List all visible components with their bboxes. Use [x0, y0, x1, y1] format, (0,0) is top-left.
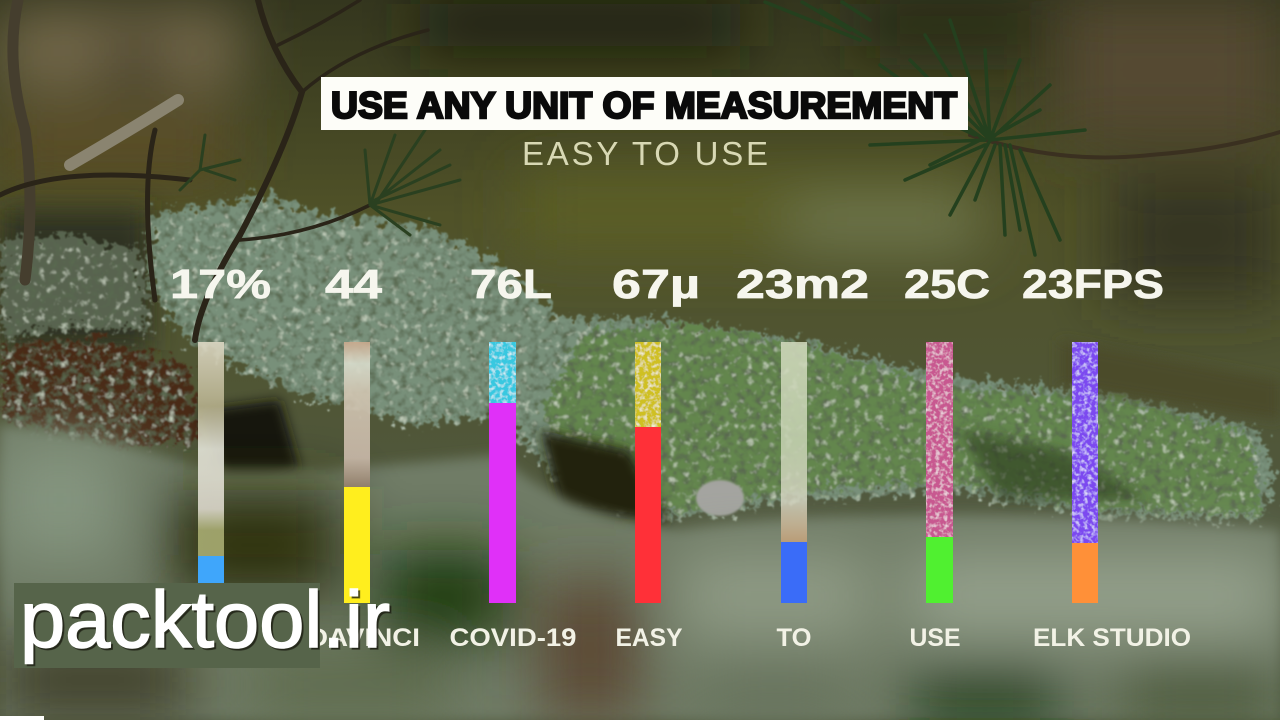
bar: 25C green	[926, 342, 953, 603]
watermark overlay panel	[14, 583, 320, 668]
category labels: DAVINCI	[308, 624, 420, 652]
subtitle: EASY TO USE	[522, 135, 768, 172]
bar: 23FPS orange	[1072, 342, 1098, 603]
blurred foreground moss	[0, 425, 1280, 720]
title banner: USE ANY UNIT OF MEASUREMENT	[331, 85, 957, 126]
watermark text: packtool.ir	[20, 575, 390, 664]
category labels: COVID-19	[450, 624, 576, 652]
value labels	[170, 261, 1164, 307]
category labels	[308, 624, 1191, 652]
dark undergrowth behind moss	[0, 210, 150, 350]
progress marker	[0, 716, 44, 720]
bar: 67µ red	[635, 342, 661, 603]
value labels: 67µ	[612, 261, 700, 307]
value labels: 17%	[170, 261, 271, 307]
value labels: 23m2	[736, 261, 869, 307]
watermark text: packtool.ir	[22, 577, 392, 666]
value labels: 25C	[904, 261, 990, 307]
category labels: TO	[776, 624, 812, 652]
branches and pine needles	[0, 0, 1280, 340]
value labels: 76L	[470, 261, 552, 307]
bar: 23m2 blue	[781, 342, 807, 603]
bar: 76L magenta	[489, 342, 516, 603]
category labels: ELK STUDIO	[1033, 624, 1191, 652]
category labels: USE	[910, 624, 960, 652]
bar: 17% blue	[198, 342, 224, 603]
bar: 44 yellow	[344, 342, 370, 603]
value labels: 44	[325, 261, 382, 307]
category labels: EASY	[616, 624, 683, 652]
value labels: 23FPS	[1022, 261, 1164, 307]
